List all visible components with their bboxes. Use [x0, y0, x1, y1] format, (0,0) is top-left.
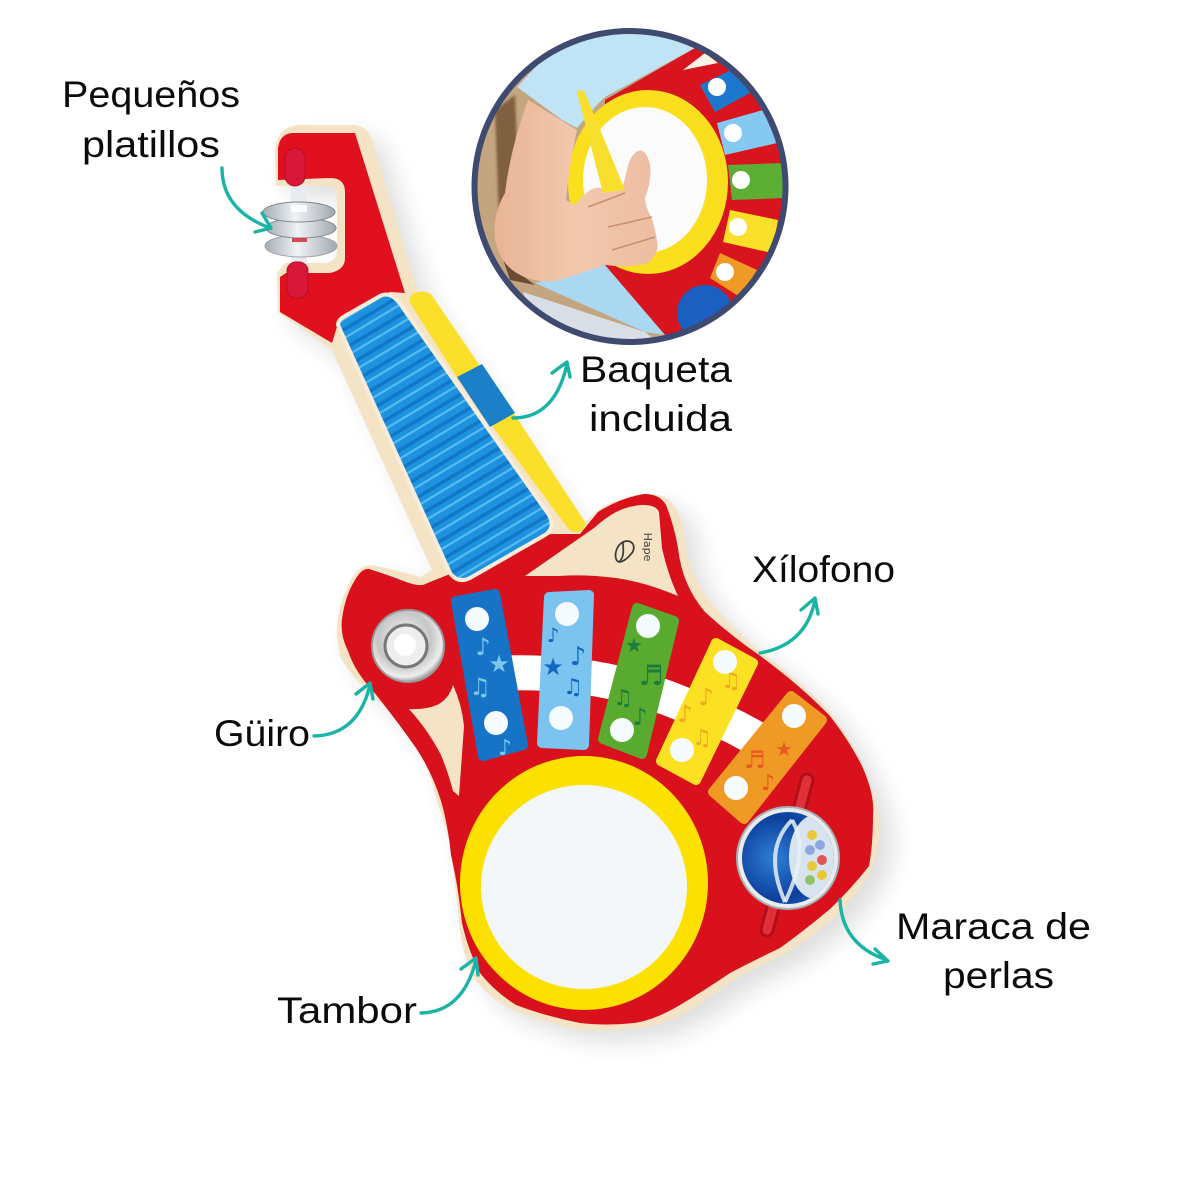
- Hape logo: [616, 533, 654, 562]
- label: Pequeños platillos: platillos: [82, 124, 220, 165]
- xylophone bar: yellow: ♪: [677, 700, 693, 728]
- red board: [605, 48, 782, 335]
- white resonator slot: [505, 673, 755, 738]
- tile pegs: [708, 78, 750, 281]
- red headstock: [278, 133, 405, 343]
- drumstick in photo: [577, 90, 625, 193]
- tile green: [728, 163, 785, 200]
- inset photo: child playing drum: [470, 25, 800, 350]
- label: Pequeños platillos: [62, 74, 240, 165]
- Hape logo: Hape: [641, 533, 654, 562]
- shirt: [517, 34, 694, 128]
- xylophone bar: light blue: ♪: [547, 623, 559, 647]
- maraca in photo: [677, 285, 730, 330]
- child arm and hand: [494, 100, 658, 281]
- güiro metal ring: [372, 610, 444, 682]
- tile orange: [710, 253, 757, 297]
- label: Maraca de perlas: perlas: [943, 955, 1054, 996]
- tile yellow: [723, 210, 778, 253]
- small cymbals: [263, 148, 337, 298]
- arrow: maraca: [840, 900, 888, 964]
- xylophone bar: yellow: [661, 643, 753, 780]
- arrow: drum: [421, 958, 478, 1013]
- arrow: drumstick: [513, 362, 570, 418]
- arrow: xylophone: [760, 598, 818, 653]
- red top post: [285, 148, 305, 186]
- xylophone bar: dark blue: ♪: [475, 633, 491, 661]
- tile light blue: [717, 110, 777, 155]
- label: Maraca de perlas: [896, 906, 1091, 996]
- xylophone bar: light blue: [542, 595, 589, 745]
- label: Güiro: Güiro: [214, 713, 310, 754]
- label: Xílofono: Xílofono: [752, 549, 895, 590]
- red bottom post: [287, 262, 308, 298]
- label: Baqueta incluida: [580, 349, 732, 439]
- wooden guitar body: [275, 125, 880, 1031]
- xylophone bar: green: ♬: [638, 659, 664, 692]
- xylophone bar: dark blue: ♫: [469, 673, 491, 701]
- drum in photo: [568, 90, 728, 274]
- wood inlay: upper right: [525, 505, 678, 596]
- xylophone bar: light blue: ♪: [570, 642, 586, 672]
- xylophone bar: light blue: ♫: [563, 675, 583, 700]
- xylophone bar: orange: ★: [775, 737, 793, 761]
- xylophone bar: light blue: ★: [542, 653, 564, 681]
- xylophone bar: yellow: ♫: [692, 726, 712, 751]
- xylophone bar: dark blue: [456, 594, 523, 761]
- xylophone bar: green: ★: [625, 633, 643, 657]
- label: Baqueta incluida: Baqueta: [580, 349, 732, 390]
- tile dark blue: [700, 68, 750, 112]
- xylophone bar: dark blue: ★: [488, 650, 510, 678]
- drum: [460, 756, 708, 1010]
- xylophone bar: green: ♫: [613, 686, 633, 711]
- wood inlay: lower left: [409, 685, 464, 796]
- bottom clothes: [535, 265, 665, 335]
- yellow drumstick: [410, 292, 585, 532]
- guitar toy: [263, 125, 894, 1043]
- arrow: güiro: [314, 683, 373, 736]
- xylophone bar: yellow: ♫: [721, 669, 741, 694]
- xylophone bar: dark blue: ♪: [498, 736, 512, 761]
- xylophone bar: yellow: ♪: [698, 683, 714, 711]
- washboard güiro panel: [338, 294, 552, 580]
- red body: [342, 494, 873, 1024]
- elastic strap: [457, 364, 515, 427]
- label: Tambor: Tambor: [277, 990, 417, 1031]
- arrow: cymbals: [222, 168, 271, 232]
- label: Maraca de perlas: Maraca de: [896, 906, 1091, 947]
- pearl maraca: [737, 780, 841, 930]
- xylophone bar: orange: [713, 696, 822, 819]
- xylophone bar: orange: ♬: [744, 746, 766, 774]
- xylophone bar: green: [603, 608, 674, 754]
- label: Baqueta incluida: incluida: [589, 398, 732, 439]
- label: Pequeños platillos: Pequeños: [62, 74, 240, 115]
- xylophone bar: green: ♪: [632, 703, 648, 731]
- xylophone bar: orange: ♪: [761, 771, 775, 796]
